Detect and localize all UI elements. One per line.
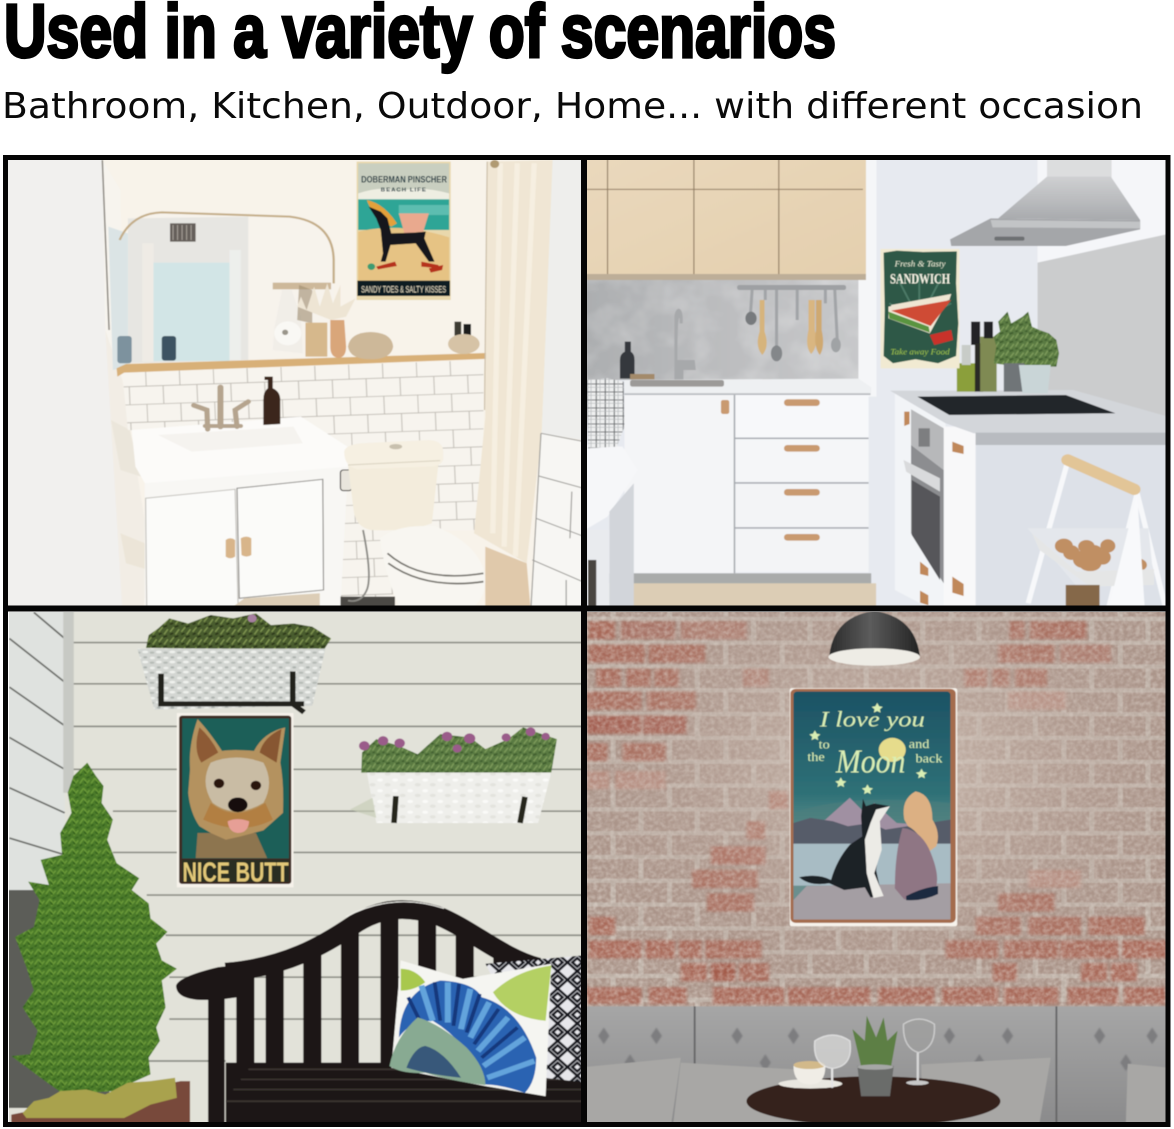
induction cooktop [917,395,1115,415]
subway tile wall [122,360,483,600]
sign: i love you to the moon and back: I love you [819,708,925,732]
range hood [950,150,1140,246]
bench seat [226,1063,602,1126]
paper holder [340,470,352,491]
panel: outdoor porch scene [0,605,602,1129]
right concrete backsplash [1037,234,1166,416]
wall glow [585,605,1174,1011]
right wall [542,160,581,439]
woven basket [348,332,393,359]
hook rail and towel [272,282,332,336]
sign: fresh and tasty sandwich [881,249,959,368]
sign: i love you to the moon and back: and [909,737,930,751]
bright upper wall [1038,160,1166,262]
panel: kitchen scene [585,150,1174,617]
sign: fresh and tasty sandwich: Fresh & Tasty [894,259,946,269]
subtitle: Bathroom, Kitchen, Outdoor, Home... with different occasion [2,86,1143,127]
faucet [674,309,696,380]
left countertop and sink [629,373,858,388]
dark leaf behind fan [297,285,312,323]
faucet [194,387,248,429]
toilet [344,440,484,590]
soap bottle [263,377,280,425]
wood block [305,323,327,357]
siding lines [73,643,602,1061]
lower cabinets [624,393,870,573]
sign: doberman beach life [357,162,451,300]
wood upper cabinets [585,150,866,280]
left wall with angled siding [0,605,113,1108]
door frame edge and draped towel [101,160,145,601]
speckled plaster [585,605,1174,1011]
sign: i love you to the moon and back: the [807,750,825,764]
vanity cabinet [145,467,348,607]
tree [11,763,177,1095]
hose [348,530,369,601]
herb plants in pots [994,312,1059,393]
dried palm fan [297,283,356,320]
sign: yorkie nice butt [177,713,294,888]
panel: bathroom scene [0,150,602,617]
potted grass [852,1016,897,1096]
floor [340,596,396,606]
oil bottles [957,322,997,392]
sign: i love you to the moon and back [790,688,957,926]
sign: yorkie nice butt: NICE BUTT [183,857,289,888]
left wall [0,150,124,617]
tub base [484,546,531,606]
leather handles [721,399,820,541]
floral pillow [389,960,551,1096]
small basket with bottles [448,322,480,354]
sign: doberman beach life: SANDY TOES & SALTY KISSES [361,285,446,295]
white wall strip [858,150,876,397]
sign: i love you to the moon and back: back [916,751,943,765]
sign: doberman beach life: DOBERMAN PINSCHER [361,175,447,185]
right tile wall [530,432,581,606]
soap dispenser [620,342,635,379]
panel: brick wall scene [585,605,1174,1129]
sofa [585,1006,1174,1127]
lower planter [350,727,557,823]
shelf [117,353,498,377]
right base cabinets [895,393,1174,617]
sign: i love you to the moon and back: Moon [835,743,905,780]
bench arm [176,964,250,1123]
sign: doberman beach life: BEACH LIFE [381,188,426,194]
right wine glass [903,1019,934,1085]
round table [747,1076,1000,1126]
sign: fresh and tasty sandwich: Take away Food [890,347,950,357]
toe kick and floor [585,573,876,617]
moss in pot [23,1078,177,1118]
right countertop [890,390,1174,445]
shower curtain [474,160,553,563]
mirror [108,212,334,370]
sign: i love you to the moon and back: to [819,737,830,751]
side table [585,445,638,617]
patterned pillow [485,954,602,1084]
left concrete backsplash [585,278,858,380]
left wine glass [815,1035,850,1088]
oven [904,409,944,583]
pendant lamp [828,611,920,666]
sign: fresh and tasty sandwich: SANDWICH [890,271,950,287]
utensil rail [737,285,846,361]
egg stand [1027,460,1165,608]
leather tabs on side cabinets [904,412,964,605]
vase [330,320,346,358]
bench back [226,902,538,1074]
vanity counter and basin [132,417,350,483]
coffee cup [778,1061,842,1089]
upper planter [137,613,331,712]
exposed red bricks [587,621,1167,1004]
wall mottling [585,278,858,380]
plaid towel [586,378,624,448]
planter pot [11,1081,190,1123]
sofa pillows [585,1058,1174,1123]
